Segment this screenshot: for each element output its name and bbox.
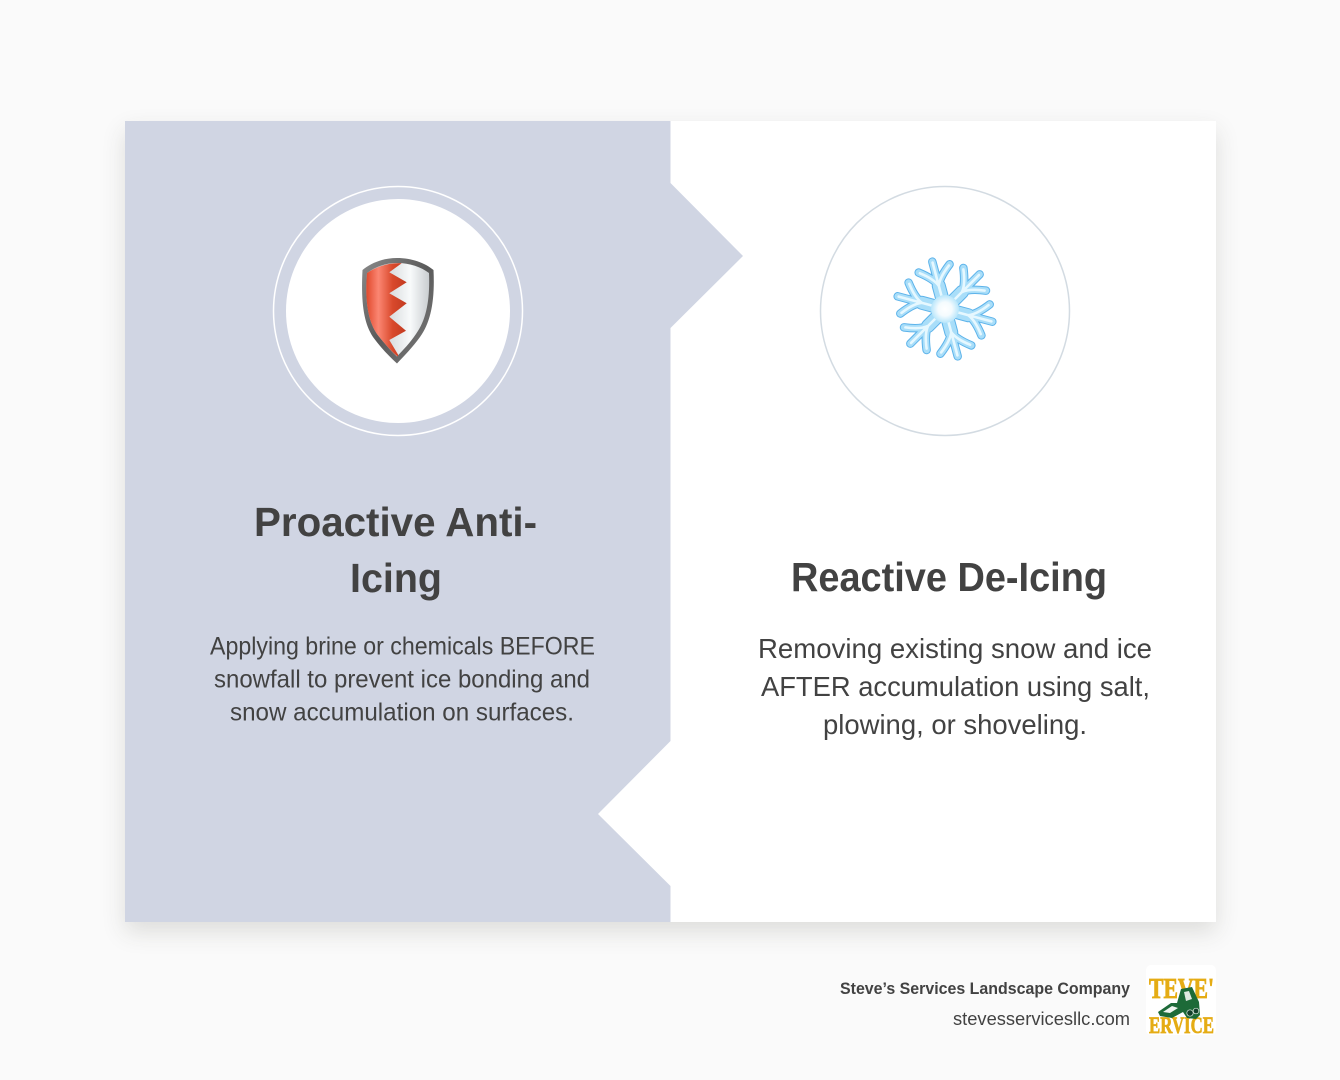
icon circle: snowflake bbox=[820, 186, 1070, 436]
heading: proactive anti-icing: Icing bbox=[350, 555, 442, 601]
description: proactive anti-icing bbox=[210, 632, 595, 726]
description: proactive anti-icing: snowfall to prevent ice bonding and bbox=[214, 666, 590, 694]
heading: proactive anti-icing bbox=[254, 499, 537, 601]
icon: snowflake bbox=[894, 258, 996, 360]
description: proactive anti-icing: Applying brine or chemicals BEFORE bbox=[210, 632, 595, 660]
description: reactive de-icing: plowing, or shoveling. bbox=[823, 709, 1087, 740]
icon: company logo: TEVE' bbox=[1149, 973, 1214, 1005]
footer: company credit bbox=[840, 965, 1216, 1038]
panel: proactive anti-icing bbox=[125, 121, 743, 922]
company name: Steve’s Services Landscape Company bbox=[840, 980, 1131, 998]
icon: shield bbox=[362, 258, 434, 364]
icon: company logo: ERVICE bbox=[1149, 1013, 1214, 1038]
panel: reactive de-icing bbox=[758, 186, 1152, 740]
company website: stevesservicesllc.com bbox=[953, 1009, 1130, 1029]
card background bbox=[125, 121, 1216, 922]
description: proactive anti-icing: snow accumulation on surfaces. bbox=[230, 698, 574, 726]
description: reactive de-icing: Removing existing snow and ice bbox=[758, 633, 1152, 664]
description: reactive de-icing bbox=[758, 633, 1152, 740]
icon: company logo bbox=[1146, 965, 1216, 1038]
icon circle: shield bbox=[274, 186, 522, 436]
heading: proactive anti-icing: Proactive Anti- bbox=[254, 499, 537, 545]
heading: reactive de-icing: Reactive De-Icing bbox=[791, 554, 1107, 600]
panel shape with arrow and notch bbox=[125, 121, 743, 922]
description: reactive de-icing: AFTER accumulation using salt, bbox=[761, 671, 1150, 702]
